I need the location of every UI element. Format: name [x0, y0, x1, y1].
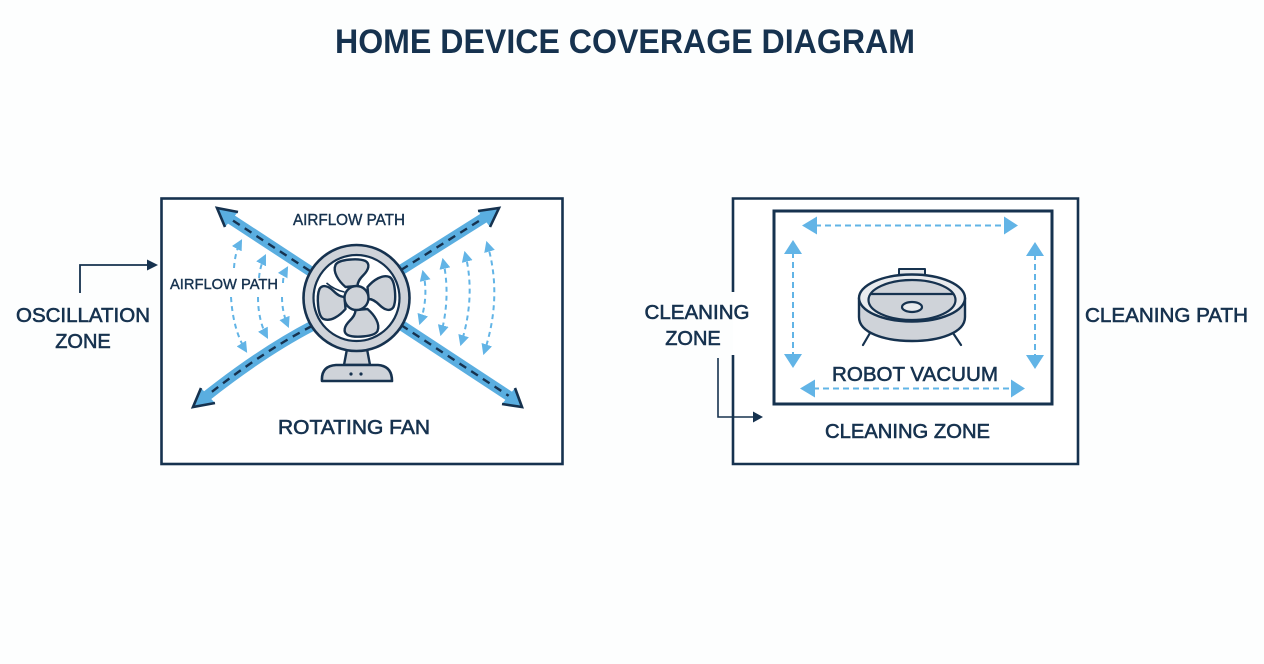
arrow: cleaning path right	[1026, 242, 1044, 369]
arrow: cleaning path bottom	[800, 380, 1025, 398]
arrow: oscillation pointer	[80, 260, 158, 293]
title: HOME DEVICE COVERAGE DIAGRAM	[335, 23, 915, 61]
panel frame: cleaning zone	[733, 198, 1078, 464]
arrow: airflow lower left	[193, 326, 312, 407]
icon: robot vacuum	[859, 269, 965, 345]
label: cleaning zone: ZONE	[665, 328, 721, 350]
callout: oscillation zone	[16, 260, 158, 353]
panel frame: fan	[162, 198, 562, 464]
panel frame: inner room	[774, 211, 1052, 404]
label: airflow path top: AIRFLOW PATH	[293, 212, 405, 229]
panel: rotating fan	[162, 198, 562, 464]
icon: rotating fan	[304, 245, 410, 381]
label: cleaning zone: CLEANING	[644, 302, 750, 324]
arrow: cleaning path left	[784, 240, 802, 368]
label: cleaning zone inside: CLEANING ZONE	[825, 421, 990, 443]
oscillation arcs: right	[420, 243, 494, 353]
arrow: airflow upper left	[217, 208, 310, 271]
arrow: airflow lower right	[401, 325, 522, 407]
label: robot vacuum: ROBOT VACUUM	[832, 363, 998, 386]
label: airflow path left: AIRFLOW PATH	[170, 276, 278, 293]
label: cleaning path: CLEANING PATH	[1085, 305, 1248, 327]
label: oscillation zone: OSCILLATION	[16, 305, 150, 327]
callout: cleaning zone	[644, 302, 763, 422]
oscillation arcs: left	[231, 241, 288, 351]
arrow: cleaning path top	[802, 216, 1018, 234]
label: rotating fan: ROTATING FAN	[278, 417, 430, 439]
panel: robot vacuum	[733, 198, 1078, 464]
arrow: cleaning zone pointer	[718, 358, 763, 422]
arrow: airflow upper right	[401, 208, 499, 270]
label: oscillation zone: ZONE	[55, 331, 111, 353]
